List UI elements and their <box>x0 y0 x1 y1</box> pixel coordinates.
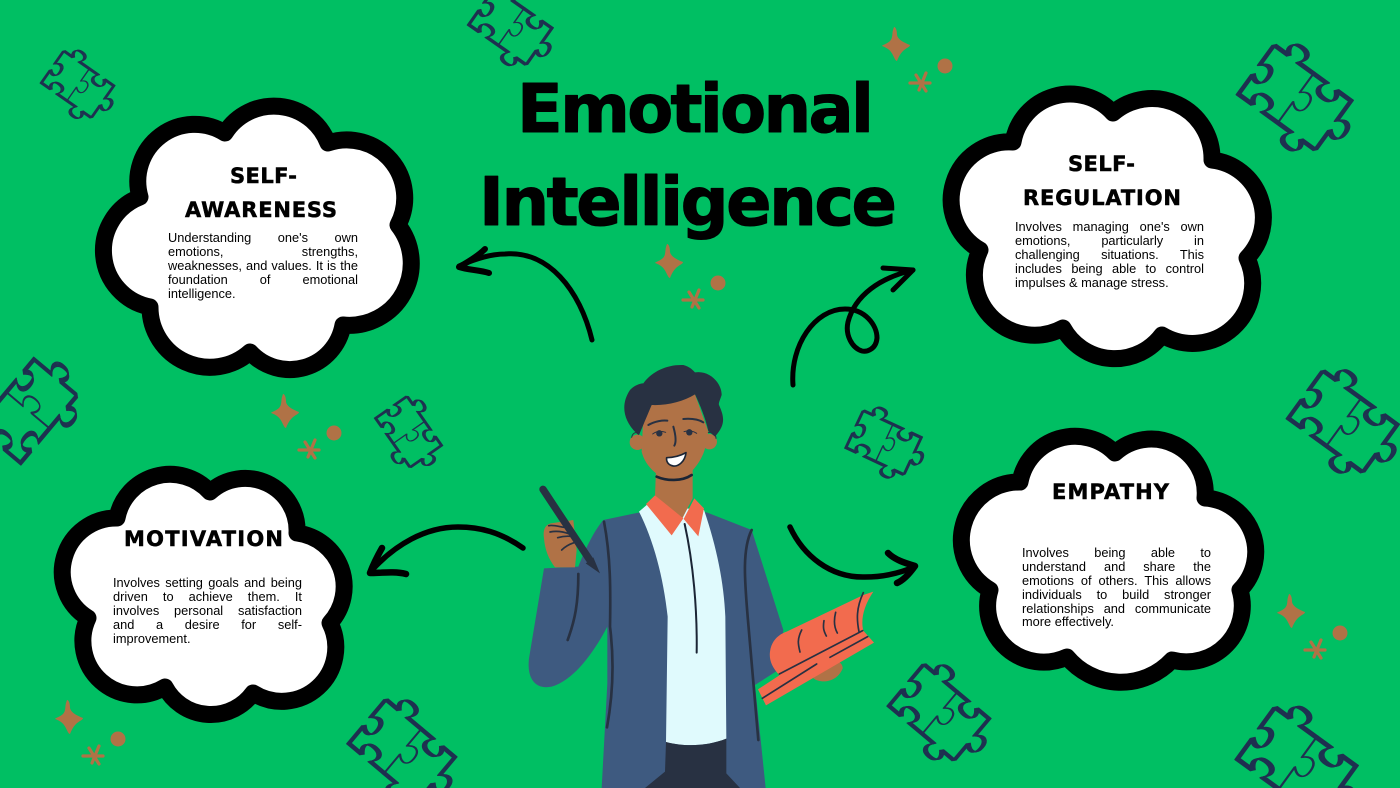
arrow: to self-regulation <box>793 268 913 385</box>
title <box>479 70 897 241</box>
trousers <box>645 739 740 788</box>
illustration: person with pen and book <box>529 365 874 788</box>
heading <box>1023 152 1181 210</box>
description: intelligence. <box>168 286 236 301</box>
heading <box>185 164 337 222</box>
pen <box>543 489 600 573</box>
description: more effectively. <box>1022 614 1114 629</box>
description: Involves setting goals and being <box>113 575 302 590</box>
collar <box>646 495 704 536</box>
puzzle piece: small right centre <box>840 400 935 489</box>
description: Involves being able to <box>1022 545 1211 560</box>
mouth <box>667 453 686 466</box>
panel: self-regulation <box>942 86 1272 368</box>
description <box>1022 545 1211 629</box>
puzzle piece: bottom left <box>338 687 476 788</box>
description: emotions, particularly in <box>1015 233 1204 248</box>
puzzle piece: left edge <box>0 339 98 473</box>
arrow: to empathy <box>790 527 915 583</box>
heading: REGULATION <box>1023 186 1181 210</box>
description <box>1015 219 1204 290</box>
sparkles: right <box>1277 594 1348 658</box>
panel: empathy <box>952 428 1264 691</box>
sparkles: left centre <box>271 394 342 458</box>
hand holding pen <box>544 520 577 567</box>
arrow: to self-awareness <box>459 249 592 340</box>
arrow: to motivation <box>370 527 523 574</box>
puzzle piece: small left centre <box>367 390 455 481</box>
description: foundation of emotional <box>168 272 358 287</box>
eyes <box>656 429 692 436</box>
title: Intelligence <box>479 163 897 241</box>
book <box>758 592 874 705</box>
description: improvement. <box>113 631 191 646</box>
finger lines <box>549 525 574 550</box>
sparkles: top right <box>882 27 952 91</box>
description: relationships and communicate <box>1022 601 1211 616</box>
description: understand and share the <box>1022 559 1211 574</box>
puzzle piece: top left <box>35 42 128 132</box>
cloud outline <box>951 94 1263 359</box>
description: Understanding one's own <box>168 230 358 245</box>
description: and a desire for self- <box>113 617 302 632</box>
heading: SELF- <box>1068 152 1135 176</box>
cloud outline <box>62 474 344 715</box>
hair <box>624 365 723 437</box>
title: Emotional <box>517 70 874 148</box>
description: driven to achieve them. It <box>113 589 302 604</box>
description: involves personal satisfaction <box>113 603 302 618</box>
description: impulses & manage stress. <box>1015 275 1169 290</box>
panel: motivation <box>54 466 353 723</box>
ears <box>630 434 717 450</box>
sparkles: bottom left <box>55 700 126 764</box>
puzzle piece: top centre <box>461 0 568 81</box>
puzzle piece: top right <box>1228 31 1373 172</box>
description: includes being able to control <box>1015 261 1204 276</box>
description: emotions of others. This allows <box>1022 573 1211 588</box>
puzzle piece: bottom centre <box>879 652 1009 780</box>
cloud outline <box>103 106 411 370</box>
description: challenging situations. This <box>1015 247 1204 262</box>
shirt placket <box>685 524 697 653</box>
heading: SELF- <box>230 164 297 188</box>
description <box>168 230 358 301</box>
face <box>642 394 708 480</box>
panel: self-awareness <box>94 98 420 378</box>
heading: EMPATHY <box>1052 480 1170 504</box>
heading: MOTIVATION <box>124 527 283 551</box>
description: individuals to build stronger <box>1022 587 1211 602</box>
description: emotions, strengths, <box>168 244 358 259</box>
description: Involves managing one's own <box>1015 219 1204 234</box>
puzzle piece: right edge <box>1278 357 1400 494</box>
shirt <box>639 505 726 745</box>
sparkles: below title <box>655 244 726 308</box>
heading: AWARENESS <box>185 198 337 222</box>
neck <box>655 470 693 518</box>
jacket seam lines <box>568 522 758 740</box>
description: weaknesses, and values. It is the <box>168 258 358 273</box>
jacket <box>529 512 783 788</box>
description <box>113 575 302 646</box>
facial features <box>632 419 716 480</box>
puzzle piece: bottom right <box>1226 693 1379 788</box>
hand holding book <box>813 659 843 681</box>
cloud outline <box>961 436 1256 682</box>
